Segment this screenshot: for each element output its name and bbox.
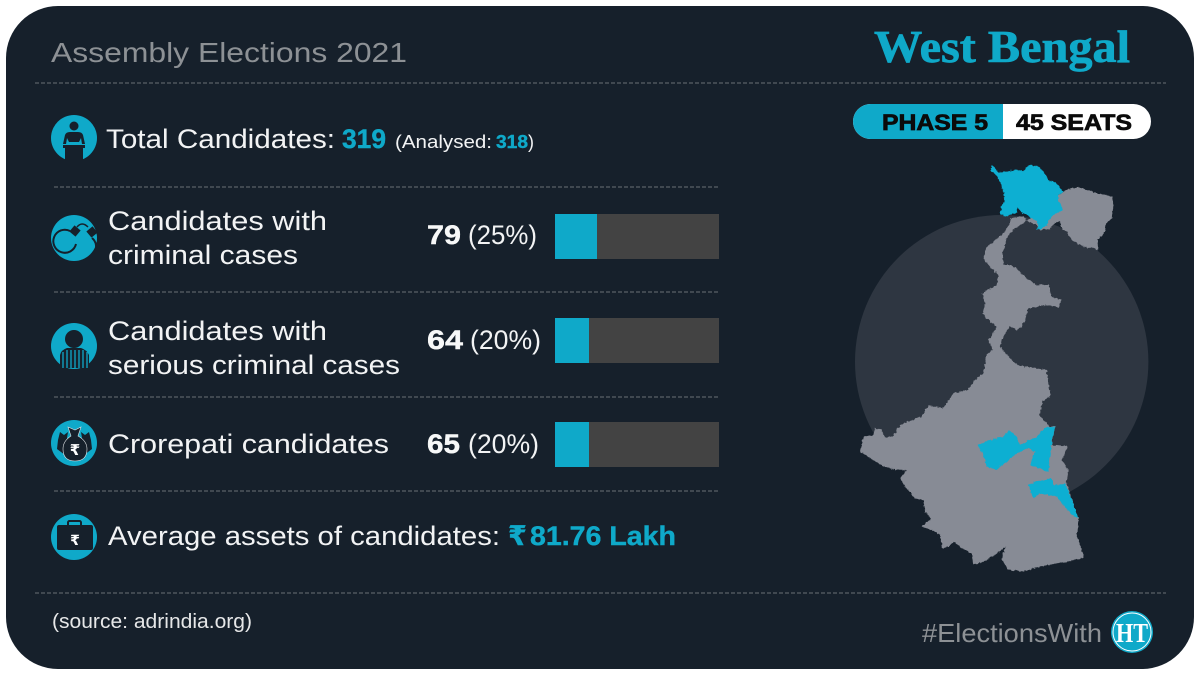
row: crorepati candidates: 65 [427,429,460,459]
row: average assets [51,514,676,560]
hashtag: #ElectionsWith [922,618,1102,648]
map: highlighted north constituencies [991,165,1063,230]
bar: 20% [555,318,719,363]
row: total candidates: ) [528,132,534,152]
map backdrop circle [855,215,1148,508]
row: average assets: Average assets of candidates: [108,521,500,551]
bar: 20% [555,422,719,467]
pill: phase and seats: PHASE 5 [882,110,988,135]
row: total candidates [51,115,534,161]
row: serious criminal cases: serious criminal cases [108,350,400,380]
icon: speaker at podium [51,115,97,161]
row: total candidates: (Analysed: [395,132,492,152]
icon: money bags: ₹ [70,441,80,459]
icon: money bags [51,420,97,466]
row: serious criminal cases: Candidates with [108,316,327,346]
map: highlighted central constituencies [977,427,1055,472]
source note: (source: adrindia.org) [52,611,252,633]
map: state outline [860,187,1113,572]
row: total candidates: 319 [342,124,386,154]
row: total candidates: Total Candidates: [106,124,335,154]
row: crorepati candidates: Crorepati candidates [108,429,389,459]
row: criminal cases: Candidates with [108,206,327,236]
title: West Bengal: West Bengal [874,21,1130,72]
row: serious criminal cases [51,316,719,380]
logo: HT: HT [1116,618,1148,648]
map: highlighted southern constituencies [1028,478,1078,518]
icon: handcuffs [51,215,98,261]
heading: Assembly Elections 2021: Assembly Elections 2021 [51,37,407,68]
logo: HT [1111,611,1153,653]
row: criminal cases: (25%) [468,220,537,250]
row: total candidates: 318 [496,132,528,152]
icon: briefcase [51,514,97,560]
pill: phase and seats [853,104,1151,139]
row: serious criminal cases: 64 [427,325,463,355]
icon: prisoner [51,323,97,369]
row: crorepati candidates: (20%) [468,429,539,459]
row: criminal cases: criminal cases [108,240,298,270]
icon: briefcase: ₹ [70,533,80,549]
row: serious criminal cases: (20%) [470,325,541,355]
row: criminal cases [51,206,719,270]
row: crorepati candidates [51,420,719,467]
bar: 25% [555,214,719,259]
row: criminal cases: 79 [427,220,461,250]
row: average assets: ₹ [508,521,527,552]
pill: phase and seats: 45 SEATS [1016,110,1132,135]
map: West Bengal [860,165,1113,572]
row: average assets: 81.76 Lakh [530,521,676,551]
